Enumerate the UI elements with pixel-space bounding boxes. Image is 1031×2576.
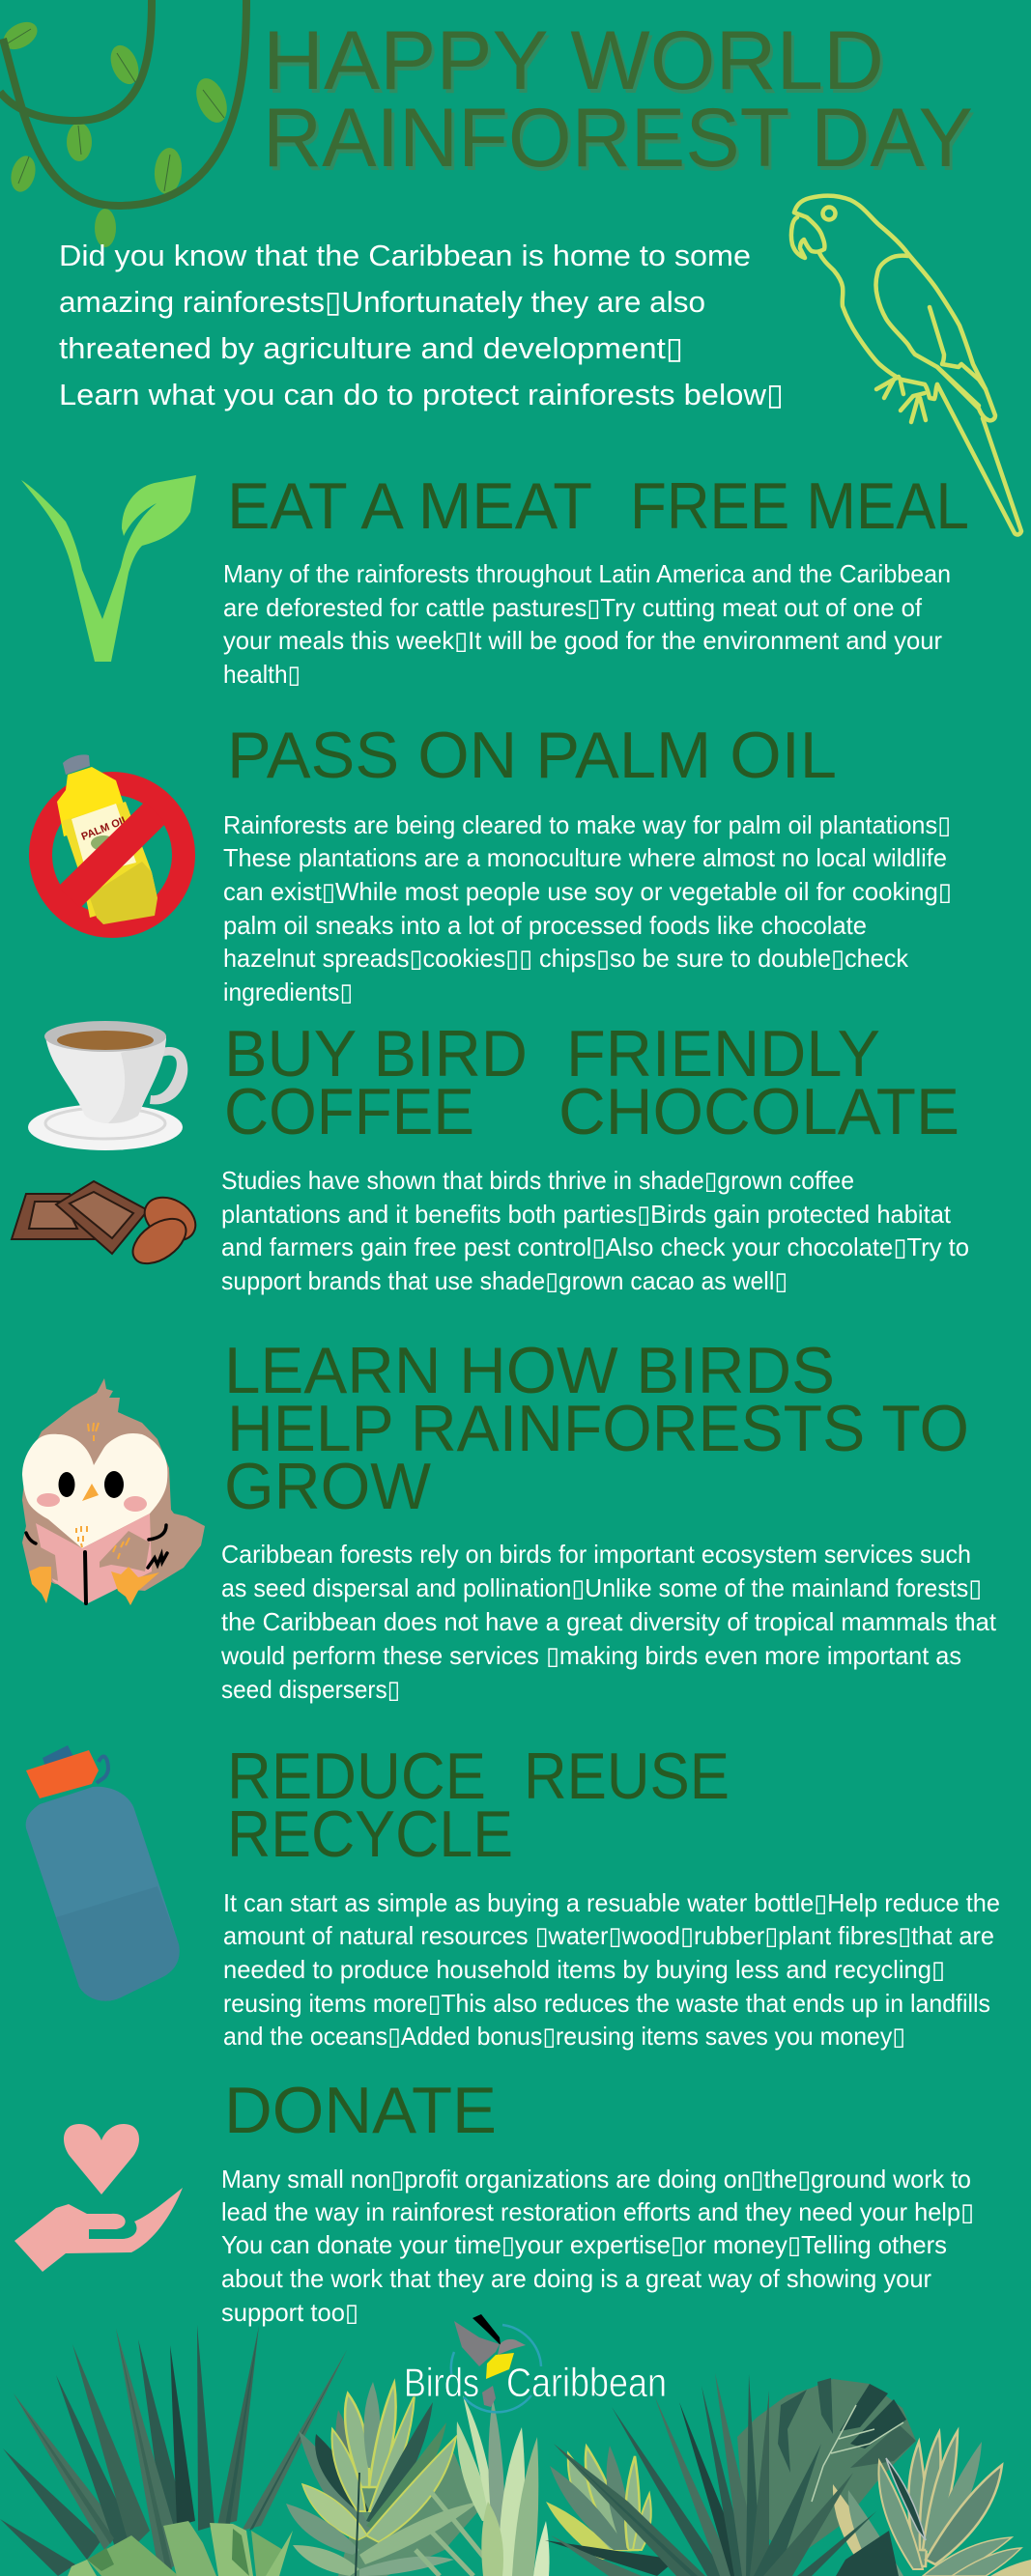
icon: reusable water bottle <box>26 1745 180 2001</box>
heading: FRIENDLY <box>566 1017 880 1090</box>
body text: amount of natural resources ▯water▯wood▯rubber▯plant fibres▯that are <box>223 1921 994 1950</box>
icon: chocolate and cacao <box>12 1181 203 1273</box>
section: bird friendly coffee and chocolate <box>12 1017 969 1295</box>
icon: heart in hand <box>14 2124 183 2272</box>
heading: COFFEE <box>224 1075 474 1148</box>
body text: Studies have shown that birds thrive in shade▯grown coffee <box>221 1166 854 1195</box>
foliage: left fan palm <box>0 2325 347 2576</box>
body text: health▯ <box>223 660 301 689</box>
title <box>263 14 973 184</box>
intro text: amazing rainforests▯Unfortunately they are also <box>59 285 705 319</box>
body text: It can start as simple as buying a resuable water bottle▯Help reduce the <box>223 1888 1000 1917</box>
title: HAPPY WORLD <box>263 14 884 107</box>
heading: PASS ON PALM OIL <box>227 719 837 792</box>
section: eat a meat free meal <box>21 469 969 689</box>
body text: can exist▯While most people use soy or vegetable oil for cooking▯ <box>223 877 952 906</box>
logo: BirdsCaribbean: Caribbean <box>506 2360 667 2405</box>
body text <box>220 1540 997 1704</box>
body text <box>221 1166 969 1295</box>
body text: needed to produce household items by buying less and recycling▯ <box>223 1955 945 1984</box>
body text: support brands that use shade▯grown cacao as well▯ <box>221 1266 788 1295</box>
body text: are deforested for cattle pastures▯Try cutting meat out of one of <box>223 593 923 622</box>
icon: green sprout <box>21 475 196 662</box>
body text: palm oil sneaks into a lot of processed foods like chocolate <box>223 911 867 940</box>
body text: Caribbean forests rely on birds for important ecosystem services such <box>221 1540 971 1569</box>
heading: REDUCE <box>227 1740 486 1813</box>
body text: Many small non▯profit organizations are doing on▯the▯ground work to <box>221 2165 971 2194</box>
body text: You can donate your time▯your expertise▯or money▯Telling others <box>221 2230 947 2259</box>
heading <box>227 1740 730 1871</box>
body text: hazelnut spreads▯cookies▯▯ chips▯so be sure to double▯check <box>223 944 909 973</box>
heading: DONATE <box>224 2074 497 2147</box>
heading <box>224 1017 959 1148</box>
section: learn how birds help rainforests <box>22 1334 997 1704</box>
heading <box>227 469 969 543</box>
icon: parrot outline <box>791 196 1021 534</box>
body text: support too▯ <box>221 2298 358 2327</box>
body text: ingredients▯ <box>223 977 353 1006</box>
body text <box>223 1888 1000 2051</box>
section: reduce reuse recycle <box>26 1740 1000 2051</box>
foliage: central pale blades <box>457 2395 550 2576</box>
foliage: right blades with tan edges <box>833 2431 1031 2576</box>
heading <box>224 1334 969 1523</box>
body text: seed dispersers▯ <box>221 1675 400 1704</box>
heading: FREE MEAL <box>630 469 969 543</box>
body text: plantations and it benefits both parties▯Birds gain protected habitat <box>221 1200 952 1229</box>
heading: GROW <box>224 1450 431 1523</box>
body text: Many of the rainforests throughout Latin America and the Caribbean <box>223 559 951 588</box>
body text: reusing items more▯This also reduces the waste that ends up in landfills <box>223 1989 990 2018</box>
foliage: right round monstera leaf <box>737 2378 916 2557</box>
section: donate <box>14 2074 974 2327</box>
icon: owl reading a book <box>22 1378 205 1605</box>
heading: EAT A MEAT <box>227 469 592 543</box>
intro text: Did you know that the Caribbean is home to some <box>59 239 751 272</box>
foliage: central fern with yellow edges <box>286 2382 498 2576</box>
body text <box>223 559 951 689</box>
icon: no palm oil <box>41 754 184 926</box>
title: RAINFOREST DAY <box>263 92 973 184</box>
body text <box>223 810 952 1006</box>
foliage: yellow edged blades behind right palm <box>546 2446 651 2560</box>
body text: These plantations are a monoculture where almost no local wildlife <box>223 843 947 872</box>
logo: BirdsCaribbean: Birds <box>404 2360 479 2405</box>
body text: the Caribbean does not have a great diversity of tropical mammals that <box>221 1607 997 1636</box>
logo: BirdsCaribbean <box>404 2314 667 2412</box>
body text <box>221 2165 974 2327</box>
icon: hanging vines with leaves <box>0 0 246 247</box>
body text: as seed dispersal and pollination▯Unlike some of the mainland forests▯ <box>221 1573 982 1602</box>
heading: REUSE <box>524 1740 730 1813</box>
icon: no palm oil: PALM OIL <box>80 813 130 843</box>
intro text: Learn what you can do to protect rainforests below▯ <box>59 378 784 411</box>
body text: about the work that they are doing is a great way of showing your <box>221 2264 931 2293</box>
section: pass on palm oil <box>41 719 952 1006</box>
intro text <box>59 239 784 411</box>
heading: CHOCOLATE <box>558 1075 959 1148</box>
heading: LEARN HOW BIRDS <box>224 1334 835 1407</box>
body text: would perform these services ▯making birds even more important as <box>220 1641 961 1670</box>
body text: and the oceans▯Added bonus▯reusing items saves you money▯ <box>223 2022 905 2051</box>
body text: Rainforests are being cleared to make way for palm oil plantations▯ <box>223 810 951 839</box>
body text: and farmers gain free pest control▯Also check your chocolate▯Try to <box>221 1232 969 1261</box>
intro text: threatened by agriculture and development▯ <box>59 331 683 365</box>
foliage: bottom left broad leaf <box>68 2521 293 2576</box>
heading: BUY BIRD <box>224 1017 528 1090</box>
heading: HELP RAINFORESTS TO <box>227 1392 969 1465</box>
heading: RECYCLE <box>227 1798 513 1871</box>
body text: lead the way in rainforest restoration efforts and they need your help▯ <box>221 2197 974 2226</box>
foliage: right fan palm <box>545 2373 876 2576</box>
icon: coffee cup <box>28 1021 187 1150</box>
body text: your meals this week▯It will be good for the environment and your <box>223 626 942 655</box>
